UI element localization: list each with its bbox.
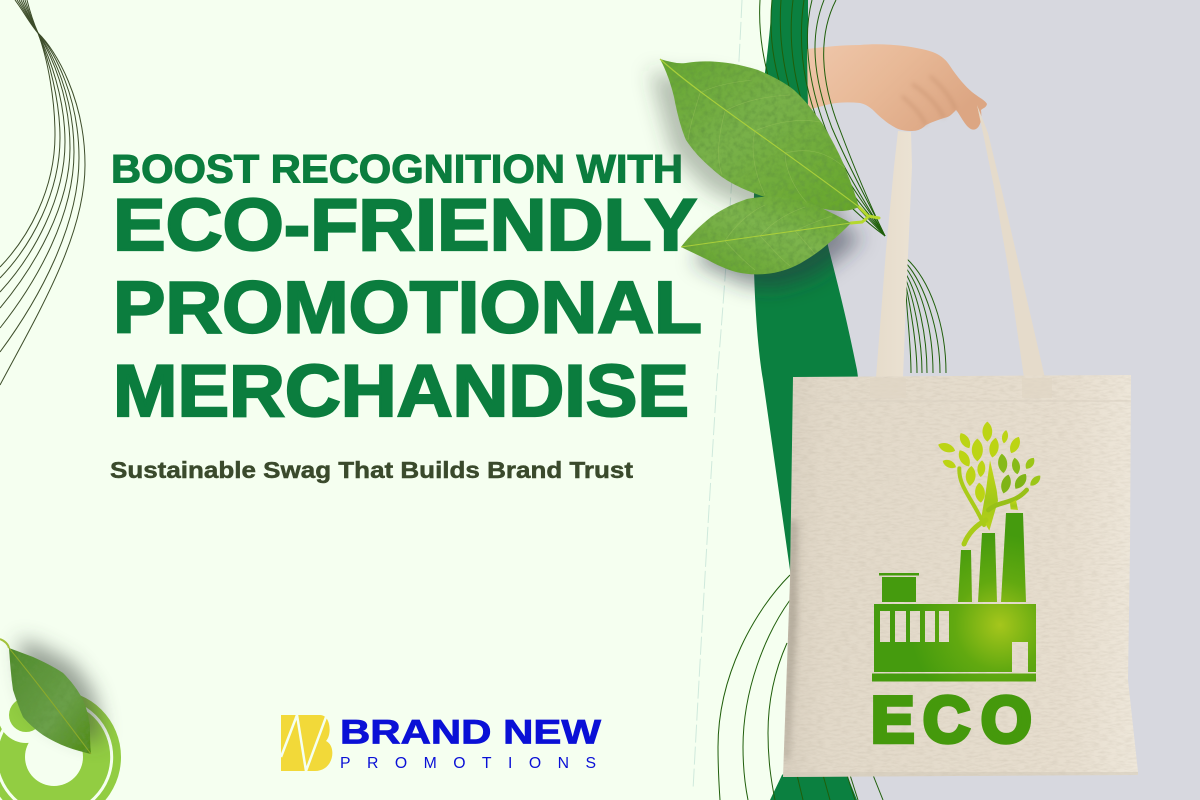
fabric shading	[780, 372, 1140, 778]
factory	[872, 513, 1036, 682]
stems	[851, 207, 879, 223]
title line 2: ECO-FRIENDLY	[113, 185, 697, 266]
leaf sprig	[650, 59, 879, 288]
leaf: bottom left	[0, 638, 101, 754]
lower leaf	[681, 197, 851, 274]
left strap	[876, 131, 912, 378]
decorative line fan: lower left	[718, 575, 883, 800]
subtitle: Sustainable Swag That Builds Brand Trust	[110, 457, 633, 483]
decorative line fan: behind hand and leaves	[760, 0, 885, 236]
tree	[937, 422, 1043, 544]
green curved band	[754, 0, 875, 800]
hand	[807, 44, 987, 131]
decorative line fan: behind strap	[906, 258, 946, 373]
logo mark	[281, 715, 332, 771]
decorative line fan: upper left	[0, 0, 85, 385]
title line 1: BOOST RECOGNITION WITH	[111, 148, 683, 192]
bag print: factory and tree	[871, 422, 1043, 756]
right strap	[977, 105, 1045, 378]
leaf shadows	[650, 70, 863, 288]
tote bag	[780, 105, 1140, 778]
title line 3: PROMOTIONAL	[113, 268, 702, 348]
dashed divider line	[693, 0, 742, 790]
logo tagline: PROMOTIONS	[340, 755, 596, 772]
logo wordmark: BRAND NEW	[340, 714, 602, 752]
title	[111, 148, 702, 432]
bag body	[783, 375, 1138, 777]
logo	[281, 714, 602, 772]
title line 4: MERCHANDISE	[113, 351, 689, 432]
circles: bottom left	[0, 687, 121, 800]
print label: ECO	[871, 683, 1032, 756]
upper leaf	[660, 59, 859, 211]
finger creases	[902, 76, 956, 125]
